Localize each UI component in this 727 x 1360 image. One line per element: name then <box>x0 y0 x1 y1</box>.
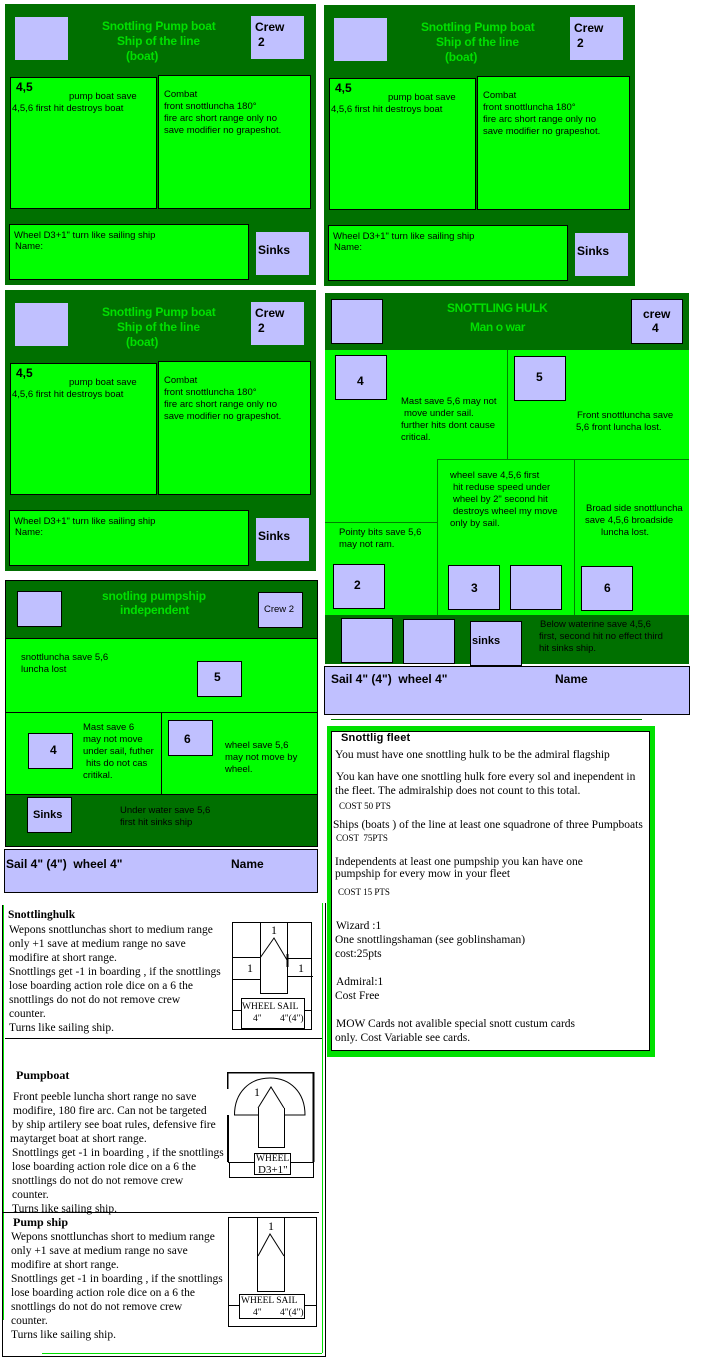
text: hulk allowance: the fleet. The admiralship does not count to this total. <box>335 785 580 797</box>
text: save rule: 4,5,6 first hit destroys boat <box>12 103 123 114</box>
text: combat rule: fire arc short range only no <box>483 114 596 125</box>
diagram: pump ship template: 1 <box>268 1219 274 1233</box>
text: pump ship rules <box>11 1231 223 1341</box>
text: mast: move under sail. <box>404 408 474 419</box>
text: pump ship rules: lose boarding action role dice on a 6 the <box>11 1287 195 1299</box>
counter: 5 <box>514 356 566 401</box>
diagram: pump ship template <box>228 1217 317 1327</box>
text: hulk rules: lose boarding action role dice on a 6 the <box>9 980 193 992</box>
text: combat rule <box>483 90 600 137</box>
diagram: pump ship template: 4" <box>253 1308 262 1318</box>
text: below waterline <box>539 619 663 654</box>
text: wheel rule <box>14 230 155 252</box>
text: hulk cost: COST 50 PTS <box>339 801 391 811</box>
diagram: hulk template: 1 <box>271 923 277 937</box>
text: pumpboat rules: Turns like sailing ship. <box>12 1203 117 1215</box>
text: combat rule: fire arc short range only no <box>164 399 277 410</box>
text: mast: Mast save 6 <box>83 722 134 733</box>
heading: hulk <box>447 301 548 334</box>
counter: 6 <box>168 720 213 756</box>
text: save rule <box>12 91 137 114</box>
counter: 4: 4 <box>50 743 57 757</box>
counter: blank bottom 1 <box>341 618 393 663</box>
text: pump ship rules: modifire at short range. <box>11 1259 119 1271</box>
diagram: pump ship template: WHEEL SAIL <box>241 1296 298 1306</box>
panel: combat <box>477 76 630 210</box>
text: pumpboat rules: counter. <box>12 1189 49 1201</box>
text: wheel: may not move by <box>225 752 297 763</box>
text: flagship rule: You must have one snottling hulk to be the admiral flagship <box>335 749 610 761</box>
counter: sinks <box>575 233 628 276</box>
text: broad side: save 4,5,6 broadside <box>585 515 673 526</box>
text: wheel rule: Name: <box>15 527 43 538</box>
text: pointy bits <box>339 527 421 550</box>
text: wheel rule: Name: <box>334 242 362 253</box>
counter: blank bottom 2 <box>403 619 455 664</box>
counter: crew: Crew <box>574 21 603 35</box>
counter: sinks: Sinks <box>258 529 290 543</box>
text: mast <box>401 396 497 443</box>
text: wheel rule <box>14 516 155 538</box>
text: snottluncha: luncha lost <box>21 664 66 675</box>
panel: pumpship hit locations <box>5 638 318 795</box>
counter: blank left <box>334 18 387 61</box>
text: pumpboat rules: Front peeble luncha short range no save <box>13 1091 196 1103</box>
text: combat rule: save modifier no grapeshot. <box>164 411 281 422</box>
text: independents: pumpship for every mow in your fleet <box>335 868 510 880</box>
text: hulk rules: Wepons snottlunchas short to medium range <box>9 924 213 936</box>
text: pump ship rules: Snottlings get -1 in boarding , if the snottlings <box>11 1273 223 1285</box>
panel: snottling fleet <box>327 726 655 1057</box>
counter: 5: 5 <box>214 670 221 684</box>
text: combat rule: save modifier no grapeshot. <box>164 125 281 136</box>
card: pump boat 1 <box>5 4 316 285</box>
counter: crew: 2 <box>577 36 584 50</box>
text: wheel rule: Wheel D3+1" turn like sailing ship <box>14 230 155 241</box>
text: hulk rules: counter. <box>9 1008 46 1020</box>
text: pointy bits: may not ram. <box>339 539 394 550</box>
text: pumpboat rules: by ship artilery see boat rules, defensive fire <box>12 1119 216 1131</box>
card: snottling hulk <box>325 293 689 664</box>
text: combat rule: Combat <box>164 89 197 100</box>
counter: crew: 4 <box>652 321 659 335</box>
counter: sinks: Sinks <box>33 809 62 821</box>
counter: crew <box>258 592 303 628</box>
heading: pumpship <box>102 589 206 617</box>
text: below waterline: hit sinks ship. <box>539 643 596 654</box>
label: 4,5: 4,5 <box>16 80 33 94</box>
text: pumpboat rules: lose boarding action role dice on a 6 the <box>12 1161 196 1173</box>
text: combat rule: save modifier no grapeshot. <box>483 126 600 137</box>
counter: 3: 3 <box>471 581 478 595</box>
counter: 4 <box>335 355 387 400</box>
counter: crew: crew <box>643 307 670 321</box>
panel: fleet text area <box>331 731 650 1051</box>
text: mast: may not move <box>83 734 143 745</box>
heading: hulk: Man o war <box>470 320 525 334</box>
heading: pump boat: Ship of the line <box>117 34 200 48</box>
text: mast: Mast save 5,6 may not <box>401 396 497 407</box>
text: wheel: only by sail. <box>450 518 500 529</box>
diagram: pumpboat template: 1 <box>254 1085 260 1099</box>
panel: hulk hit locations <box>325 350 689 615</box>
heading: pump boat: Snottling Pump boat <box>421 20 535 34</box>
text: snottluncha: snottluncha save 5,6 <box>21 652 108 663</box>
text: combat rule: fire arc short range only no <box>164 113 277 124</box>
counter: crew <box>251 16 304 59</box>
text: below waterline: Below waterine save 4,5,6 <box>540 619 651 630</box>
counter: 6 <box>581 566 633 611</box>
text: hulk allowance: You kan have one snottling hulk fore every sol and inependent in <box>336 771 635 783</box>
counter: crew <box>631 299 683 344</box>
counter: sinks: sinks <box>472 635 500 647</box>
text: save rule: pump boat save <box>69 91 137 102</box>
text: under water: Under water save 5,6 <box>120 805 210 816</box>
label: 4,5: 4,5 <box>335 81 352 95</box>
text: wheel <box>225 740 298 775</box>
text: pumpboat rules: modifire, 180 fire arc. Can not be targeted <box>13 1105 207 1117</box>
text: front snottluncha: 5,6 front luncha lost. <box>576 422 662 433</box>
heading: pump boat: Snottling Pump boat <box>102 19 216 33</box>
text: pumpship speed: Sail 4" (4") wheel 4" <box>6 857 122 871</box>
text: independents cost: COST 15 PTS <box>338 887 390 897</box>
counter: crew: Crew <box>255 20 284 34</box>
text: wizard: Wizard :1 <box>336 920 381 932</box>
text: pump ship rules: Turns like sailing ship. <box>11 1329 116 1341</box>
text: wheel rule: Wheel D3+1" turn like sailing ship <box>333 231 474 242</box>
text: combat rule <box>164 89 281 136</box>
counter: crew <box>570 17 623 60</box>
counter: sinks <box>27 797 72 833</box>
label: 4,5: 4,5 <box>16 366 33 380</box>
counter: blank middle <box>510 565 562 610</box>
text: save rule: 4,5,6 first hit destroys boat <box>12 389 123 400</box>
diagram: hulk template: 4" <box>253 1014 262 1024</box>
text: pumpboat rules: maytarget boat at short range. <box>10 1133 147 1145</box>
counter: 2: 2 <box>354 578 361 592</box>
counter: blank left <box>17 591 62 627</box>
counter: 6: 6 <box>604 581 611 595</box>
counter: crew: 2 <box>258 321 265 335</box>
text: wheel: wheel save 5,6 <box>225 740 288 751</box>
text: front snottluncha: Front snottluncha save <box>577 410 673 421</box>
diagram: pumpboat template <box>227 1072 314 1178</box>
text: snottluncha <box>21 652 108 675</box>
text: wheel <box>450 470 558 529</box>
text: hulk rules: snottlings do not do not remove crew <box>9 994 180 1006</box>
counter: sinks: Sinks <box>258 243 290 257</box>
text: admiral <box>335 976 383 1002</box>
bar: hulk sail and name <box>324 666 690 715</box>
diagram: hulk template: 4"(4") <box>280 1013 304 1024</box>
counter: 4 <box>28 733 73 769</box>
panel: snottlinghulk rules <box>8 909 313 1034</box>
text: wizard: cost:25pts <box>335 948 382 960</box>
heading: pump boat <box>421 20 535 64</box>
text: wizard: One snottlingshaman (see goblinshaman) <box>335 934 525 946</box>
text: front snottluncha <box>576 410 673 433</box>
text: save rule <box>12 377 137 400</box>
diagram: pumpboat template: D3+1" <box>258 1164 288 1176</box>
text: mast: under sail, futher <box>83 746 154 757</box>
text: hulk rules: modifire at short range. <box>9 952 117 964</box>
counter: 6: 6 <box>184 732 191 746</box>
diagram: hulk template: WHEEL SAIL <box>242 1002 299 1012</box>
text: wheel: wheel. <box>225 764 252 775</box>
card: pump boat 3 <box>5 290 316 571</box>
text: name: Name <box>231 857 264 871</box>
heading: pump boat: (boat) <box>126 335 158 349</box>
text: pumpboat rules <box>10 1091 224 1215</box>
text: wheel: hit reduse speed under <box>453 482 550 493</box>
text: combat rule: Combat <box>164 375 197 386</box>
counter: crew: 2 <box>258 35 265 49</box>
heading: pump boat: Snottling Pump boat <box>102 305 216 319</box>
counter: crew <box>251 302 304 345</box>
heading: pumpship: snotling pumpship <box>102 589 206 603</box>
text: pointy bits: Pointy bits save 5,6 <box>339 527 421 538</box>
text: mast: critical. <box>401 432 431 443</box>
text: under water <box>120 805 210 828</box>
heading: pump boat: Ship of the line <box>117 320 200 334</box>
text: wizard <box>335 920 525 960</box>
text: combat rule: Combat <box>483 90 516 101</box>
diagram: hulk template <box>232 922 313 1030</box>
heading: hulk: SNOTTLING HULK <box>447 301 547 315</box>
text: wheel: wheel by 2" second hit <box>453 494 548 505</box>
text: combat rule <box>164 375 281 422</box>
text: name: Name <box>555 672 588 686</box>
panel: wheel <box>9 510 249 566</box>
counter: blank left <box>15 303 68 346</box>
text: hulk rules: Turns like sailing ship. <box>9 1022 114 1034</box>
counter: blank left <box>331 299 383 344</box>
heading: pump boat: Ship of the line <box>436 35 519 49</box>
text: mast: hits do not cas <box>86 758 147 769</box>
card: pump boat 2 <box>324 5 635 286</box>
text: hulk rules <box>9 924 221 1034</box>
text: wheel rule <box>333 231 474 253</box>
heading: snottlig fleet: Snottlig fleet <box>341 732 410 744</box>
text: admiral: Admiral:1 <box>336 976 383 988</box>
diagram: pumpboat template: WHEEL <box>256 1154 289 1164</box>
text: combat rule: front snottluncha 180° <box>483 102 576 113</box>
panel: combat <box>158 75 311 209</box>
text: pump ship rules: only +1 save at medium range no save <box>11 1245 188 1257</box>
text: combat rule: front snottluncha 180° <box>164 101 257 112</box>
text: hulk rules: Snottlings get -1 in boarding , if the snottlings <box>9 966 221 978</box>
text: hulk speed: Sail 4" (4") wheel 4" <box>331 672 447 686</box>
text: mow cards: MOW Cards not avalible special snott custum cards <box>336 1018 575 1030</box>
text: pump ship rules: snottlings do not do not remove crew <box>11 1301 182 1313</box>
panel: pump boat save <box>329 78 476 210</box>
text: broad side: Broad side snottluncha <box>586 503 683 514</box>
counter: blank left <box>15 17 68 60</box>
panel: pumpboat rules <box>10 1068 314 1215</box>
text: mast: critikal. <box>83 770 113 781</box>
diagram: hulk template: 1 <box>298 961 304 975</box>
text: independents: Independents at least one pumpship you kan have one <box>335 856 583 868</box>
counter: 2 <box>333 564 385 609</box>
counter: sinks <box>256 232 309 275</box>
text: pumpboat rules: Snottlings get -1 in boarding , if the snottlings <box>12 1147 224 1159</box>
panel: wheel <box>9 224 249 280</box>
heading: pumpship: independent <box>120 603 189 617</box>
card: pumpship <box>5 580 318 847</box>
text: save rule: 4,5,6 first hit destroys boat <box>331 104 442 115</box>
text: pump ship rules: counter. <box>11 1315 48 1327</box>
text: below waterline: first, second hit no effect third <box>539 631 663 642</box>
heading: pump boat: (boat) <box>445 50 477 64</box>
counter: 5: 5 <box>536 370 543 384</box>
counter: crew: Crew <box>255 306 284 320</box>
bar: pumpship sail and name <box>4 849 318 893</box>
diagram: hulk template: 1 <box>247 961 253 975</box>
text: save rule: pump boat save <box>69 377 137 388</box>
heading: pump boat: (boat) <box>126 49 158 63</box>
panel: pump boat save <box>10 363 157 495</box>
panel: pump ship rules <box>11 1215 317 1341</box>
text: hulk allowance <box>335 771 636 797</box>
heading: pump boat <box>102 305 216 349</box>
counter: sinks <box>256 518 309 561</box>
text: mow cards <box>335 1018 575 1044</box>
counter: 4: 4 <box>357 374 364 388</box>
text: combat rule: front snottluncha 180° <box>164 387 257 398</box>
text: wheel rule: Wheel D3+1" turn like sailing ship <box>14 516 155 527</box>
text: ships of the line: Ships (boats ) of the line at least one squadrone of three Pumpboats <box>333 819 643 831</box>
text: mast: further hits dont cause <box>401 420 495 431</box>
diagram: pump ship template: 4"(4") <box>280 1307 304 1318</box>
text: mast <box>83 722 154 781</box>
panel: pump boat save <box>10 77 157 209</box>
text: pumpboat rules: snottlings do not do not remove crew <box>12 1175 183 1187</box>
text: admiral: Cost Free <box>335 990 379 1002</box>
text: hulk rules: only +1 save at medium range no save <box>9 938 186 950</box>
text: under water: first hit sinks ship <box>120 817 192 828</box>
text: independents <box>335 856 583 880</box>
counter: sinks <box>470 621 522 666</box>
text: wheel: wheel save 4,5,6 first <box>450 470 539 481</box>
panel: combat <box>158 361 311 495</box>
text: save rule: pump boat save <box>388 92 456 103</box>
text: broad side: luncha lost. <box>601 527 649 538</box>
heading: pump boat <box>102 19 216 63</box>
counter: crew: Crew 2 <box>264 604 294 615</box>
heading: snottlinghulk: Snottlinghulk <box>8 909 75 921</box>
panel: wheel <box>328 225 568 281</box>
text: wheel rule: Name: <box>15 241 43 252</box>
text: mow cards: only. Cost Variable see cards. <box>335 1032 470 1044</box>
text: wheel: destroys wheel my move <box>453 506 558 517</box>
text: ships cost: COST 75PTS <box>336 833 388 843</box>
heading: pump ship: Pump ship <box>13 1215 68 1229</box>
text: save rule <box>331 92 456 115</box>
counter: 3 <box>448 565 500 610</box>
counter: 5 <box>197 661 242 697</box>
text: pump ship rules: Wepons snottlunchas short to medium range <box>11 1231 215 1243</box>
counter: sinks: Sinks <box>577 244 609 258</box>
text: broad side <box>585 503 683 538</box>
heading: pumpboat: Pumpboat <box>16 1068 69 1082</box>
